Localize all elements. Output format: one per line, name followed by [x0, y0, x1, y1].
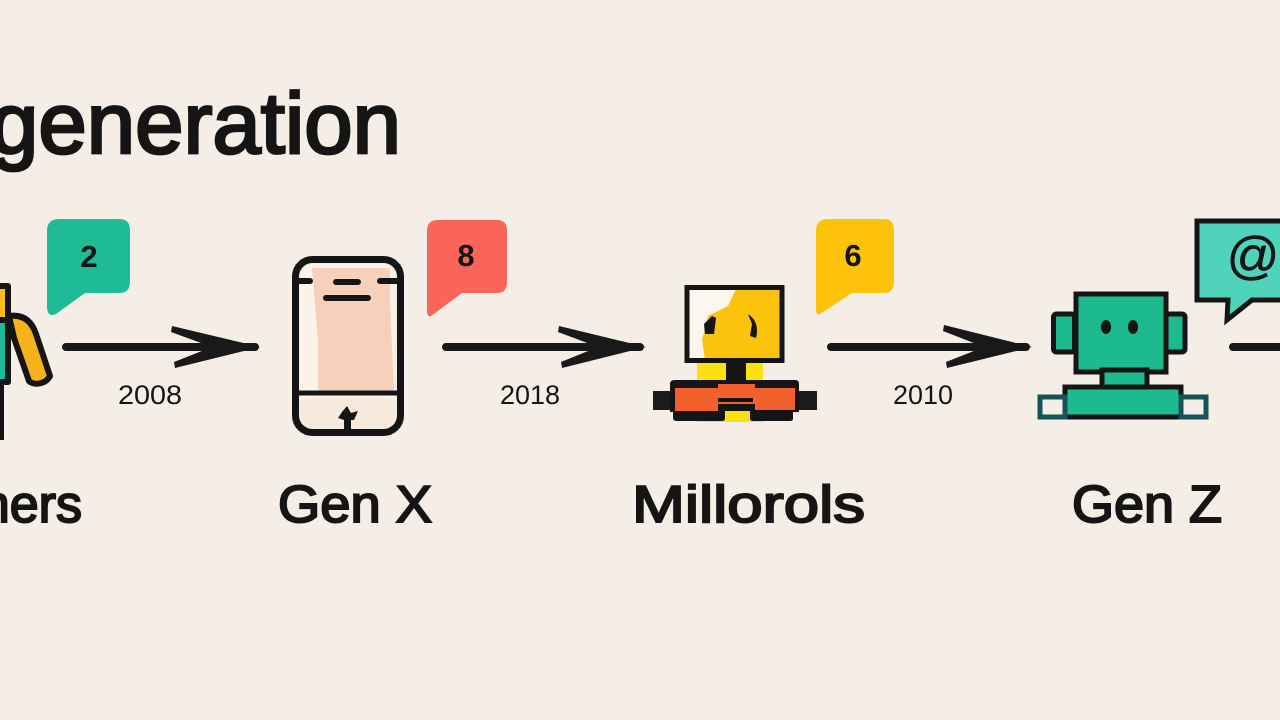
speech bubble: yellow: 6	[844, 238, 862, 273]
year label: 2018	[500, 380, 560, 410]
arrow: gen x to millennials	[446, 326, 646, 368]
icon: phone star	[338, 406, 358, 429]
arrow: boomers to gen x	[66, 326, 260, 368]
icon: robot computer	[1040, 294, 1206, 417]
label: millennials: Millorols	[632, 476, 865, 534]
label: gen z: Gen Z	[1072, 476, 1222, 534]
arrow: next segment	[1233, 343, 1280, 351]
speech bubble: red: 8	[457, 238, 475, 273]
icon: desktop computer	[653, 287, 817, 422]
arrow: millennials to gen z	[831, 325, 1032, 368]
title: generation	[0, 76, 401, 172]
robot eyes	[1101, 320, 1138, 334]
speech bubble: yellow	[816, 219, 894, 314]
speech bubble: red	[427, 220, 507, 316]
icon: boomers person	[0, 286, 50, 440]
speech bubble: teal at-sign	[1197, 221, 1280, 320]
speech bubble: green	[47, 219, 130, 315]
speech bubble: green: 2	[80, 239, 98, 274]
icon: phone	[296, 260, 400, 432]
year label: 2010	[893, 380, 953, 410]
speech bubble: teal at-sign: @	[1227, 227, 1279, 285]
year label: 2008	[118, 380, 182, 410]
label: gen x: Gen X	[278, 476, 432, 534]
